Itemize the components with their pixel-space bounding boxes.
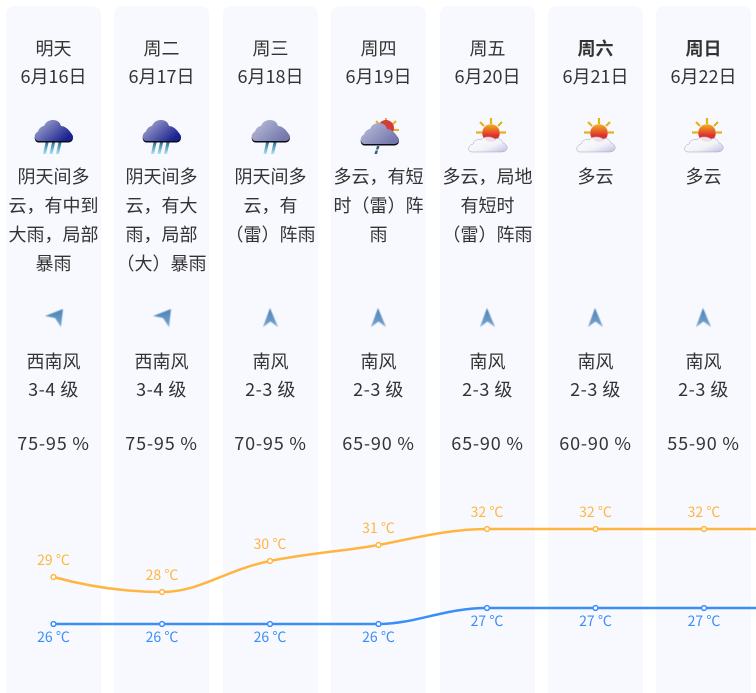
date heading: 6月21日 [562,63,628,89]
wind [353,348,404,402]
date heading: 6月17日 [128,63,194,89]
date heading [20,35,86,89]
wind: 3-4 级 [28,376,79,402]
date heading: 周三 [252,35,288,61]
weather description [442,163,532,247]
date heading: 周四 [360,35,396,61]
weather description: 阴天间多 [18,163,90,189]
date heading: 6月16日 [20,63,86,89]
icon: wind direction [153,308,172,328]
date heading: 6月18日 [238,63,303,89]
wind: 南风 [578,348,614,374]
weather description [226,163,316,247]
date heading: 6月20日 [454,63,520,89]
humidity: 55-90 % [667,430,740,456]
wind [570,348,621,402]
weather description: 时（雷）阵 [334,192,424,218]
weather description [116,163,206,276]
weather description [334,163,424,247]
date heading [454,35,520,89]
date heading: 周二 [144,35,180,61]
panel: day 6 [548,6,643,693]
date heading: 6月22日 [670,63,736,89]
weather description [8,163,98,276]
date heading [346,35,411,89]
date heading: 周五 [470,35,506,61]
date heading: 明天 [36,35,72,61]
date heading [670,35,736,89]
low temperature line: 26 ℃ [37,627,70,647]
low temperature line: 26 ℃ [254,627,286,647]
high temperature line: 30 ℃ [254,534,286,554]
panel: day 4 [331,6,426,693]
humidity: 75-95 % [17,430,90,456]
date heading: 周日 [686,35,722,61]
icon: wind direction [696,308,712,328]
icon: sun, cloud and shower [360,118,399,154]
panel: day 2 [114,6,209,693]
wind: 南风 [686,348,722,374]
weather description: 有短时 [460,192,514,218]
wind: 西南风 [134,348,188,374]
date heading: 周六 [578,35,614,61]
humidity: 70-95 % [234,430,307,456]
weather description: 云，有中到 [8,192,98,218]
panel: day 1 [6,6,101,693]
low temperature line: 27 ℃ [471,611,503,631]
wind [678,348,729,402]
humidity: 75-95 % [125,430,198,456]
date heading [238,35,303,89]
weather description: 云，有大 [126,192,198,218]
panel: day 3 [223,6,318,693]
weather description: 雨 [370,221,388,247]
weather description: 暴雨 [36,250,72,276]
wind: 南风 [252,348,288,374]
wind [245,348,296,402]
icon: heavy rain [34,120,73,154]
icon: partly cloudy [468,118,508,152]
low temperature line: 27 ℃ [688,611,720,631]
humidity: 65-90 % [451,430,524,456]
date heading [128,35,194,89]
weather description: （雷）阵雨 [442,221,532,247]
date heading [562,35,628,89]
weather description: （大）暴雨 [116,250,206,276]
wind: 南风 [470,348,506,374]
weather description: 阴天间多 [234,163,306,189]
high temperature line: 31 ℃ [362,518,395,538]
wind [462,348,513,402]
wind: 西南风 [26,348,80,374]
icon: partly cloudy [576,118,616,152]
low temperature line: 26 ℃ [362,627,395,647]
high temperature line: 28 ℃ [146,565,178,585]
weather description: 多云，局地 [442,163,532,189]
weather description: （雷）阵雨 [226,221,316,247]
high temperature line: 32 ℃ [688,502,720,522]
high temperature line: 29 ℃ [37,550,70,570]
wind [26,348,80,402]
low temperature line [37,606,756,647]
icon: wind direction [588,308,604,328]
high temperature line: 32 ℃ [471,502,503,522]
weather description: 云，有 [244,192,298,218]
high temperature line [37,502,756,594]
icon: heavy rain [142,120,181,154]
wind: 2-3 级 [678,376,729,402]
humidity: 65-90 % [342,430,415,456]
icon: wind direction [45,308,64,328]
weather description: 多云 [578,163,614,189]
icon: wind direction [262,308,278,328]
icon: thunder shower [252,120,290,154]
wind: 2-3 级 [462,376,513,402]
weather description: 多云 [686,163,722,189]
icon: wind direction [480,308,496,328]
wind [134,348,188,402]
wind: 2-3 级 [353,376,404,402]
icon: wind direction [370,308,386,328]
wind: 南风 [360,348,396,374]
wind: 2-3 级 [570,376,621,402]
wind: 2-3 级 [245,376,296,402]
icon: partly cloudy [684,118,724,152]
weather description: 阴天间多 [126,163,198,189]
low temperature line: 27 ℃ [579,611,612,631]
date heading: 6月19日 [346,63,411,89]
weather description: 大雨，局部 [8,221,98,247]
wind: 3-4 级 [136,376,187,402]
panel: day 5 [440,6,535,693]
weather description: 多云，有短 [334,163,424,189]
panel: day 7 [656,6,751,693]
high temperature line: 32 ℃ [579,502,612,522]
low temperature line: 26 ℃ [146,627,178,647]
humidity: 60-90 % [559,430,632,456]
weather description: 雨，局部 [126,221,198,247]
